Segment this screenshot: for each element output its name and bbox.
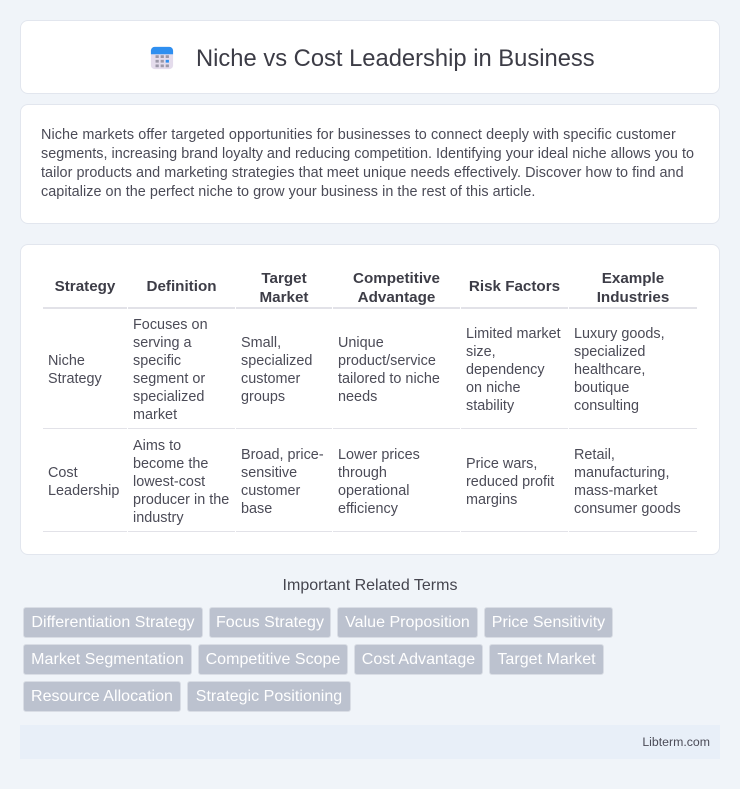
related terms tags: Focus Strategy	[216, 614, 324, 631]
related terms heading: Important Related Terms	[283, 577, 457, 594]
table row: niche strategy: dependency	[466, 362, 545, 378]
table row: niche strategy: market	[133, 407, 177, 423]
table row: cost leadership: industry	[133, 510, 184, 526]
table row: niche strategy: boutique	[574, 380, 629, 396]
table row: cost leadership: margins	[466, 492, 517, 508]
table row: niche strategy: Small,	[241, 335, 281, 351]
intro paragraph: tailor products and marketing strategies that meet unique needs effectively. Discover how to find and	[41, 165, 684, 181]
table row: cost leadership: customer	[241, 483, 300, 499]
table row: cost leadership: consumer goods	[574, 501, 681, 517]
table row: cost leadership: producer in the	[133, 492, 229, 508]
table header row: Industries	[597, 289, 669, 306]
table row: cost leadership: Lower prices	[338, 447, 420, 463]
table row: cost leadership	[43, 438, 697, 532]
table row: niche strategy: specialized	[241, 353, 312, 369]
table header row: Example	[602, 270, 664, 287]
intro text panel	[20, 104, 720, 224]
table row: cost leadership: through	[338, 465, 387, 481]
table row: niche strategy: Niche	[48, 353, 85, 369]
table header row	[43, 270, 697, 309]
table row: niche strategy: healthcare,	[574, 362, 645, 378]
table row: niche strategy: serving a	[133, 335, 192, 351]
panel: comparison table	[20, 244, 720, 555]
table row: niche strategy: Limited market	[466, 326, 561, 342]
table header row: Definition	[146, 278, 217, 295]
table row: niche strategy: size,	[466, 344, 496, 360]
related terms tags: Strategic Positioning	[196, 688, 342, 705]
table row: niche strategy: consulting	[574, 398, 639, 414]
table row: cost leadership: become the	[133, 456, 208, 472]
table row: niche strategy: Unique	[338, 335, 384, 351]
related terms tags: Market Segmentation	[31, 651, 184, 668]
related terms tags: Resource Allocation	[31, 688, 173, 705]
intro paragraph: segments, increasing brand loyalty and reducing competition. Identifying your ideal niche allows you to	[41, 146, 694, 162]
table row: niche strategy: stability	[466, 398, 514, 414]
table header row: Market	[260, 289, 308, 306]
table header row: Strategy	[55, 278, 115, 295]
table row: niche strategy: on niche	[466, 380, 521, 396]
table header row: Advantage	[358, 289, 435, 306]
table row: niche strategy: customer	[241, 371, 300, 387]
table row: cost leadership: manufacturing,	[574, 465, 669, 481]
table row: cost leadership: reduced profit	[466, 474, 554, 490]
table row: cost leadership: Cost	[48, 465, 78, 481]
title: Niche vs Cost Leadership in Business	[196, 45, 595, 72]
related terms tags: Price Sensitivity	[492, 614, 605, 631]
related terms tags: Competitive Scope	[206, 651, 340, 668]
table row: niche strategy: product/service	[338, 353, 436, 369]
table row: niche strategy: Strategy	[48, 371, 102, 387]
icon: calendar	[150, 46, 174, 70]
table row: cost leadership: base	[241, 501, 272, 517]
table row: cost leadership: Leadership	[48, 483, 119, 499]
related terms tags: Differentiation Strategy	[31, 614, 195, 631]
table row: niche strategy: specific	[133, 353, 181, 369]
table row: niche strategy: Luxury goods,	[574, 326, 665, 342]
table row: niche strategy: specialized	[574, 344, 645, 360]
related terms tags: Target Market	[497, 651, 596, 668]
footer bar	[20, 725, 720, 759]
intro paragraph: Niche markets offer targeted opportunities for businesses to connect deeply with specific customer	[41, 127, 676, 143]
table header row: Competitive	[353, 270, 440, 287]
table row: niche strategy: specialized	[133, 389, 204, 405]
table row: cost leadership: Retail,	[574, 447, 615, 463]
related terms tags: Cost Advantage	[362, 651, 475, 668]
table row: niche strategy	[43, 317, 697, 429]
footer credit: Libterm.com	[642, 735, 710, 749]
table row: niche strategy: groups	[241, 389, 285, 405]
table row: niche strategy: tailored to niche	[338, 371, 440, 387]
table row: cost leadership: sensitive	[241, 465, 297, 481]
header panel	[20, 20, 720, 94]
table row: niche strategy: Focuses on	[133, 317, 208, 333]
table header row: Target	[261, 270, 307, 287]
table row: cost leadership: Price wars,	[466, 456, 537, 472]
table row: cost leadership: efficiency	[338, 501, 398, 517]
table row: niche strategy: needs	[338, 389, 377, 405]
table row: cost leadership: lowest-cost	[133, 474, 205, 490]
table row: cost leadership: Broad, price-	[241, 447, 324, 463]
related terms tags	[23, 607, 613, 712]
table row: cost leadership: operational	[338, 483, 409, 499]
table header row: Risk Factors	[469, 278, 560, 295]
related terms tags: Value Proposition	[345, 614, 470, 631]
intro paragraph: capitalize on the perfect niche to grow your business in the rest of this article.	[41, 184, 535, 200]
table row: niche strategy: segment or	[133, 371, 205, 387]
intro paragraph	[41, 127, 694, 200]
table row: cost leadership: Aims to	[133, 438, 181, 454]
table row: cost leadership: mass-market	[574, 483, 657, 499]
